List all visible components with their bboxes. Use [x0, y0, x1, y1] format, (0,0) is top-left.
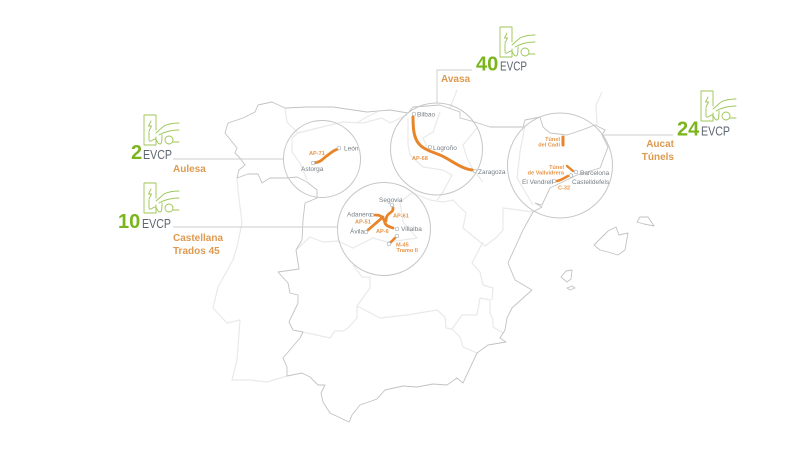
label: Astorga: Astorga — [301, 166, 324, 173]
label: Aucat Túnels: Túnels — [642, 152, 674, 163]
label: AP-51: AP-51 — [355, 220, 371, 226]
map of Spain — [213, 90, 654, 422]
route C-32 — [557, 176, 568, 181]
node: Barcelona — [574, 170, 578, 174]
node: Ávila — [364, 230, 368, 234]
panel: Castellana / Trados 45 — [173, 182, 430, 276]
label: Avasa: Avasa — [441, 74, 471, 85]
stat: 40 EVCP: EVCP — [500, 58, 527, 74]
stat: 10 EVCP: 10 — [118, 211, 140, 233]
coastline and frontiers — [225, 102, 608, 422]
label: Castellana Trados 45: Trados 45 — [173, 246, 220, 257]
label: Castellana Trados 45: Castellana — [173, 233, 223, 244]
zoom circle: Avasa — [390, 103, 482, 195]
icon: charger and car (Aulesa) — [144, 115, 179, 145]
label: Ávila: Ávila — [350, 226, 364, 236]
label: AP-6: AP-6 — [376, 229, 389, 235]
node: Logroño — [428, 145, 432, 149]
label: Zaragoza: Zaragoza — [478, 169, 506, 176]
route Túnel del Cadí — [562, 137, 564, 145]
label: El Vendrell: El Vendrell — [522, 179, 554, 186]
label: AP-68: AP-68 — [412, 156, 428, 162]
label: AP-71: AP-71 — [309, 151, 325, 157]
label: Tramo II: Tramo II — [396, 248, 418, 254]
label: Castelldefels: Castelldefels — [572, 179, 610, 186]
route Túnel de Vallvidrera — [567, 166, 573, 171]
zoom circle: Aulesa — [284, 120, 360, 198]
icon: charger and car (Aucat) — [701, 91, 736, 121]
node: Tramo II — [395, 234, 399, 238]
stat: 10 EVCP — [118, 211, 171, 233]
zoom circle: Castellana — [338, 182, 430, 276]
stat: 2 EVCP: EVCP — [143, 147, 172, 162]
panel: Aulesa — [173, 120, 360, 198]
node: Astorga — [311, 161, 315, 165]
label: AP-61: AP-61 — [393, 214, 409, 220]
node: Villalba — [395, 227, 399, 231]
node: Zaragoza — [473, 169, 477, 173]
routes AP-6 AP-51 AP-61 — [368, 208, 393, 230]
stat: 24 EVCP: 24 — [677, 118, 700, 140]
route AP-71 — [314, 149, 338, 163]
label: del Cadí: del Cadí — [538, 142, 560, 148]
label: Aucat Túnels — [642, 139, 675, 163]
label: Logroño: Logroño — [433, 145, 457, 152]
leader line: Aucat — [603, 134, 673, 136]
node: Segovia — [390, 203, 394, 207]
label: Túnel del Cadí: Túnel — [545, 137, 560, 143]
label: Bilbao: Bilbao — [417, 112, 435, 118]
node: Castelldefels — [569, 174, 573, 177]
Balearic Islands — [561, 217, 654, 290]
node: M-45 — [387, 242, 391, 246]
icon: charger and car (Avasa) — [500, 27, 535, 57]
node: Bilbao — [412, 112, 416, 116]
leader line: Aulesa — [173, 158, 283, 160]
label: de Vallvidrera: de Vallvidrera — [528, 170, 565, 176]
label: Barcelona: Barcelona — [580, 170, 610, 177]
label: Adanero: Adanero — [347, 212, 372, 218]
node: León — [337, 146, 341, 150]
panel: Aucat Túnels — [508, 113, 673, 218]
label: Aucat Túnels: Aucat — [646, 139, 675, 150]
label: C-32: C-32 — [558, 186, 570, 192]
stat: 24 EVCP: EVCP — [701, 124, 730, 138]
label: Castellana Trados 45 — [173, 233, 223, 257]
leader line: Castellana — [173, 226, 337, 228]
node: El Vendrell — [552, 179, 556, 183]
label: León: León — [344, 146, 359, 152]
node: Adanero — [370, 213, 374, 217]
label: M-45 Tramo II: M-45 — [396, 242, 409, 248]
label: Segovia: Segovia — [379, 197, 403, 204]
icon: charger and car (Castellana) — [144, 183, 179, 213]
regional borders — [213, 90, 602, 382]
leader line: Avasa — [437, 70, 472, 103]
stat: 40 EVCP: 40 — [476, 54, 498, 76]
stat: 24 EVCP — [677, 118, 730, 140]
panel: Avasa — [390, 70, 506, 195]
route M-45 — [390, 238, 395, 243]
stat: 2 EVCP — [131, 142, 172, 164]
stat: 2 EVCP: 2 — [131, 142, 142, 164]
label: Aulesa: Aulesa — [173, 164, 206, 175]
route AP-68 — [413, 117, 472, 170]
zoom circle: Aucat — [508, 113, 612, 218]
stat: 40 EVCP — [476, 54, 527, 76]
stat: 10 EVCP: EVCP — [142, 216, 171, 231]
label: Túnel: Túnel — [549, 165, 564, 171]
label: Villalba: Villalba — [401, 226, 422, 233]
